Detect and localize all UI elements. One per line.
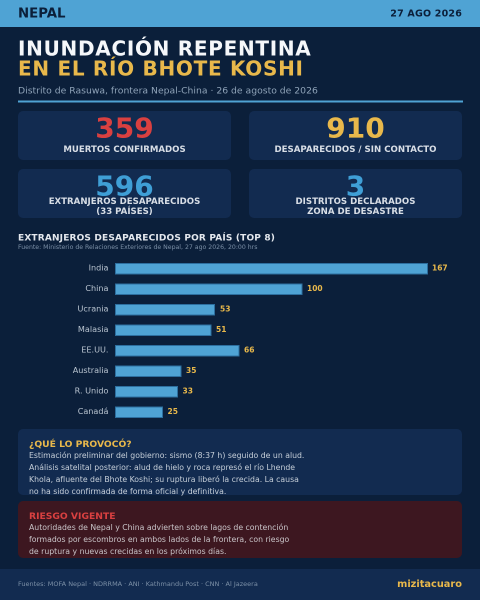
stat card: muertos: MUERTOS CONFIRMADOS <box>63 145 186 155</box>
bar chart: Canadá <box>78 406 109 416</box>
bar chart: 100 <box>307 284 323 293</box>
causes text: no ha sido confirmada de forma oficial y definitiva. <box>29 487 226 496</box>
causes text: Estimación preliminar del gobierno: sismo (8:37 h) seguido de un alud. <box>29 451 304 460</box>
stat card: desaparecidos: DESAPARECIDOS / SIN CONTACTO <box>274 145 437 155</box>
footer: Fuentes: MOFA Nepal · NDRRMA · ANI · Kathmandu Post · CNN · Al Jazeera <box>18 580 258 588</box>
risk text: formados por escombros en ambos lados de la frontera, con riesgo <box>29 535 290 544</box>
bar chart: China <box>85 283 109 293</box>
risk text: Autoridades de Nepal y China advierten sobre lagos de contención <box>29 523 288 532</box>
bar chart: Ucrania <box>78 304 109 314</box>
bar chart: 33 <box>182 386 193 396</box>
chart heading: EXTRANJEROS DESAPARECIDOS POR PAÍS (TOP 8) <box>18 232 275 244</box>
stat card: extranjeros: (33 PAÍSES) <box>96 205 153 217</box>
bar chart: 51 <box>216 325 226 334</box>
subtitle: Distrito de Rasuwa, frontera Nepal-China · 26 de agosto de 2026 <box>18 86 318 96</box>
bar chart: 53 <box>220 304 230 314</box>
stat card: desaparecidos <box>249 111 462 160</box>
header band <box>0 0 480 27</box>
panel: risk <box>18 501 462 558</box>
bar chart: 35 <box>186 366 196 375</box>
stat card: extranjeros <box>18 169 231 218</box>
stat card: desaparecidos: 910 <box>326 112 385 144</box>
bar chart: 167 <box>432 264 448 272</box>
risk text: de ruptura y nuevas crecidas en los próximos días. <box>29 547 226 556</box>
bar chart: R. Unido <box>75 386 109 396</box>
bar chart: Australia <box>73 365 109 375</box>
causes text: Khola, afluente del Bhote Koshi; su ruptura liberó la crecida. La causa <box>29 475 299 484</box>
title: INUNDACIÓN REPENTINA <box>18 36 311 60</box>
bar chart: 66 <box>244 346 254 354</box>
chart source: Fuente: Ministerio de Relaciones Exteriores de Nepal, 27 ago 2026, 20:00 hrs <box>18 244 257 251</box>
stat card: distritos <box>249 169 462 218</box>
bar chart: 25 <box>168 407 178 416</box>
footer <box>0 569 480 600</box>
bar chart: India <box>89 262 109 272</box>
causes text <box>29 451 304 496</box>
risk heading: RIESGO VIGENTE <box>29 511 116 522</box>
panel: causes <box>18 429 462 496</box>
stat card: distritos: ZONA DE DESASTRE <box>307 207 404 217</box>
stat card: distritos: DISTRITOS DECLARADOS <box>296 197 415 207</box>
bar chart: EE.UU. <box>81 344 108 354</box>
causes heading: ¿QUÉ LO PROVOCÓ? <box>29 438 132 450</box>
bar chart <box>73 262 448 418</box>
title: EN EL RÍO BHOTE KOSHI <box>18 56 304 80</box>
bar chart: Malasia <box>78 324 109 334</box>
stat card: extranjeros: EXTRANJEROS DESAPARECIDOS <box>49 197 200 207</box>
causes text: Análisis satelital posterior: alud de hielo y roca represó el río Lhende <box>29 463 295 472</box>
title <box>18 36 311 80</box>
stat card: distritos: 3 <box>346 170 365 202</box>
header band: 27 AGO 2026 <box>390 8 462 20</box>
footer: mizitacuaro <box>397 579 462 590</box>
stat card: extranjeros: 596 <box>95 170 154 202</box>
stat card: muertos: 359 <box>95 112 154 144</box>
header band: NEPAL <box>18 6 66 22</box>
risk text <box>29 523 290 556</box>
stat card: muertos <box>18 111 231 160</box>
